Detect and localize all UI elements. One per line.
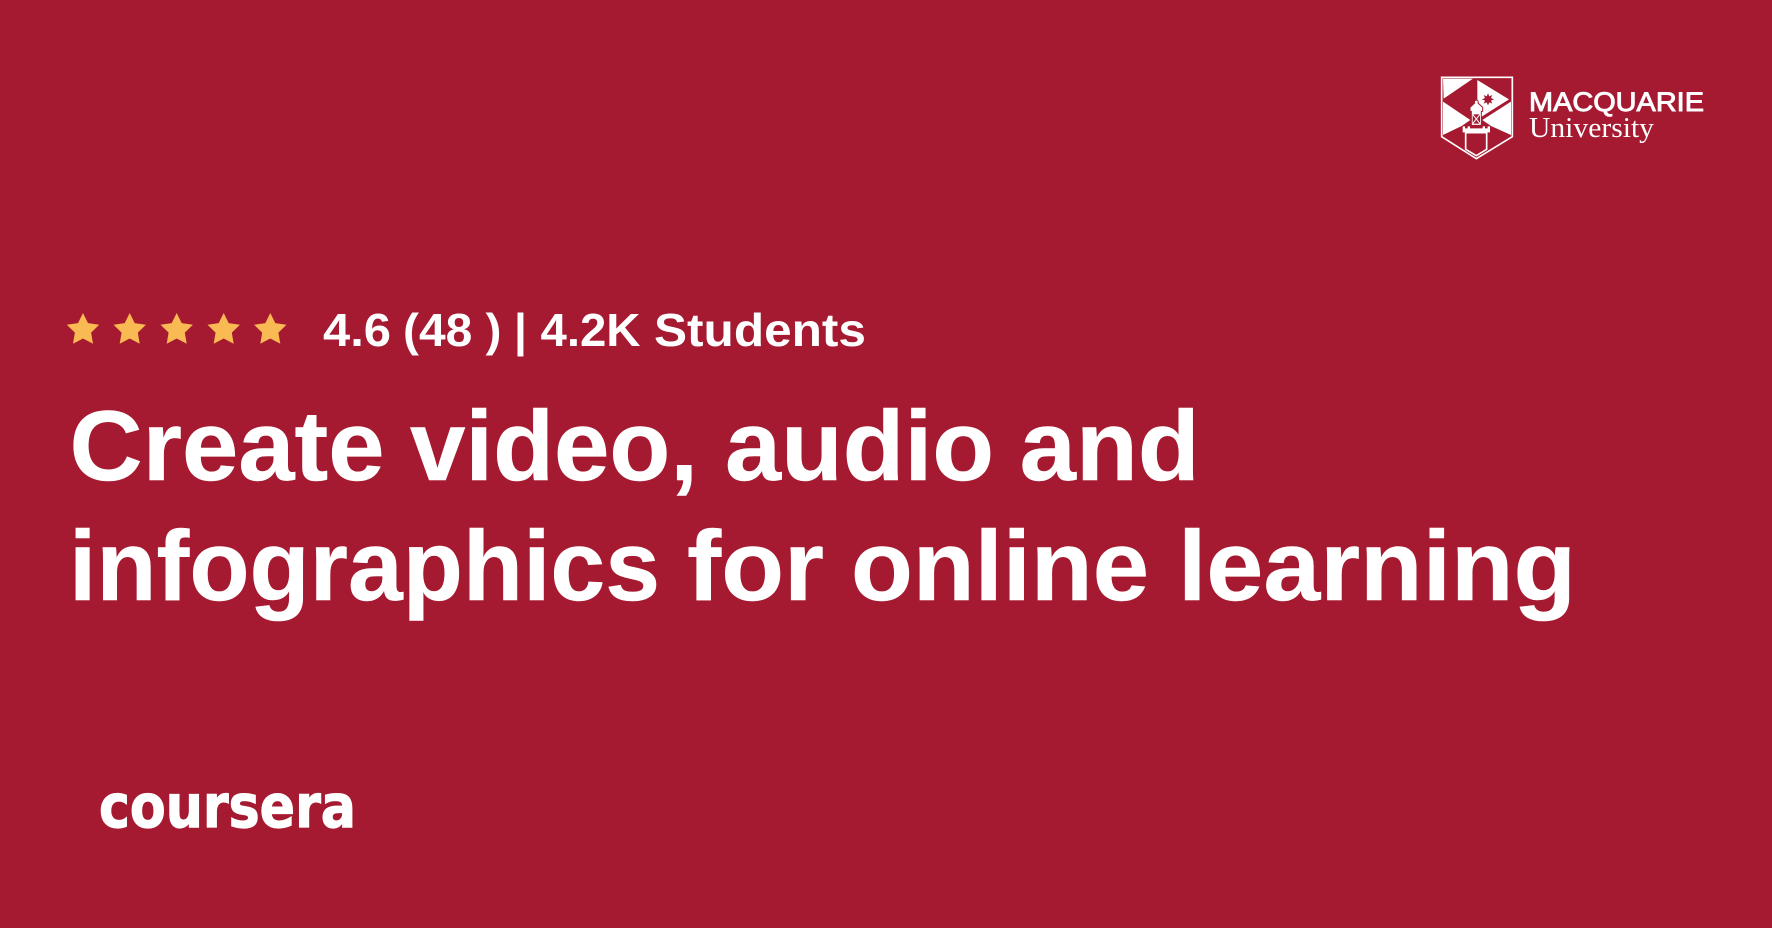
title line 2: for — [687, 510, 824, 621]
title line 1: video, — [410, 390, 698, 501]
rating row — [67, 304, 866, 356]
title line 2: learning — [1178, 510, 1576, 621]
rating and student count: (48 ) — [403, 304, 502, 356]
rating and student count: 4.6 — [323, 304, 391, 356]
rating and student count — [323, 304, 866, 356]
Coursera logo: coursera — [99, 772, 356, 842]
rating and student count: Students — [654, 304, 866, 356]
title line 2 — [69, 510, 1576, 621]
logo wordmark: University: University — [1529, 113, 1654, 144]
title line 1 — [70, 390, 1200, 501]
title line 2: infographics — [69, 510, 660, 621]
rating and student count: 4.2K — [540, 304, 640, 356]
icon: five rating stars — [67, 313, 286, 344]
icon: Macquarie shield — [1442, 77, 1512, 159]
title line 1: Create — [70, 390, 384, 501]
logo wordmark: MACQUARIE: MACQUARIE — [1529, 87, 1704, 117]
title line 1: and — [1020, 390, 1200, 501]
title — [69, 390, 1576, 621]
rating and student count: | — [514, 304, 527, 356]
Macquarie University logo — [1442, 77, 1704, 159]
title line 2: online — [851, 510, 1149, 621]
title line 1: audio — [725, 390, 994, 501]
